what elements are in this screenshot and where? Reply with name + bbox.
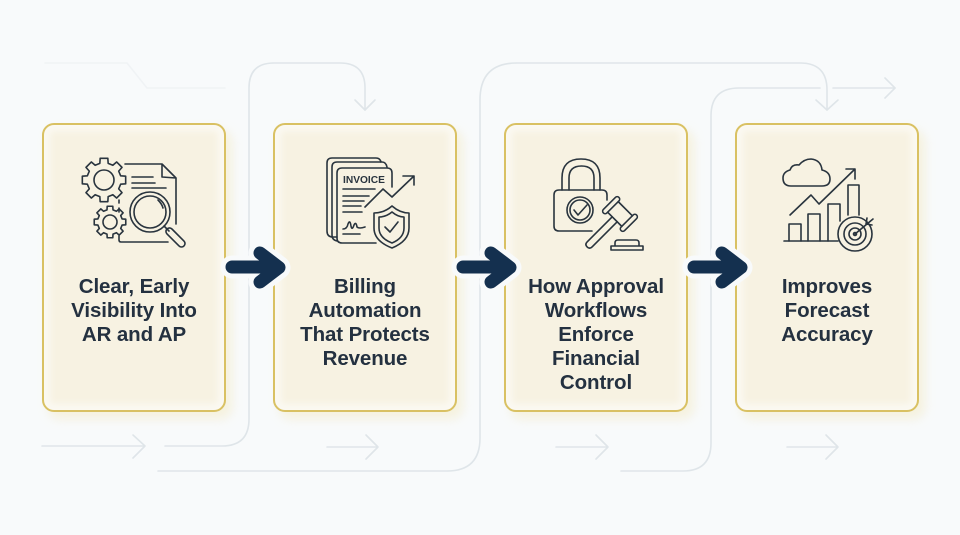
arrow: panel two to three	[463, 253, 510, 282]
label: Automation	[309, 299, 421, 322]
bottom arrow two	[327, 435, 378, 459]
icon: cloud, bar chart and target	[782, 158, 874, 252]
icon: invoice stack, trend arrow and shield: INVOICE	[343, 175, 385, 186]
label	[781, 275, 873, 346]
arrow: panel one to two	[232, 253, 279, 282]
panel: billing automation	[273, 123, 457, 412]
label: Workflows	[545, 299, 647, 322]
icon: gears, document and magnifier	[82, 158, 186, 248]
bottom arrow three	[556, 435, 608, 459]
connector: card three to top right arrow	[621, 78, 895, 471]
arrow: panel three to four	[694, 253, 741, 282]
label: Financial	[552, 347, 640, 370]
icon: padlock and gavel	[553, 158, 644, 251]
label: Improves	[782, 275, 872, 298]
bottom arrow one	[42, 435, 145, 458]
label: Billing	[334, 275, 396, 298]
panel: approval workflows	[504, 123, 688, 412]
label: AR and AP	[82, 323, 186, 346]
bottom arrow four	[787, 435, 838, 459]
label: How Approval	[528, 275, 664, 298]
label	[300, 275, 430, 370]
label: That Protects	[300, 323, 430, 346]
panel: forecast accuracy	[735, 123, 919, 412]
panel: visibility into AR and AP	[42, 123, 226, 412]
label: Revenue	[323, 347, 407, 370]
faint stepped line	[45, 63, 225, 88]
connector: card one to card two	[165, 63, 375, 446]
label	[528, 275, 664, 394]
label	[71, 275, 197, 346]
icon: invoice stack, trend arrow and shield	[326, 157, 415, 249]
connector: card two to card four	[158, 63, 838, 471]
label: Control	[560, 371, 632, 394]
label: Forecast	[785, 299, 869, 322]
label: Accuracy	[781, 323, 873, 346]
label: Visibility Into	[71, 299, 197, 322]
label: Enforce	[558, 323, 634, 346]
label: Clear, Early	[79, 275, 189, 298]
